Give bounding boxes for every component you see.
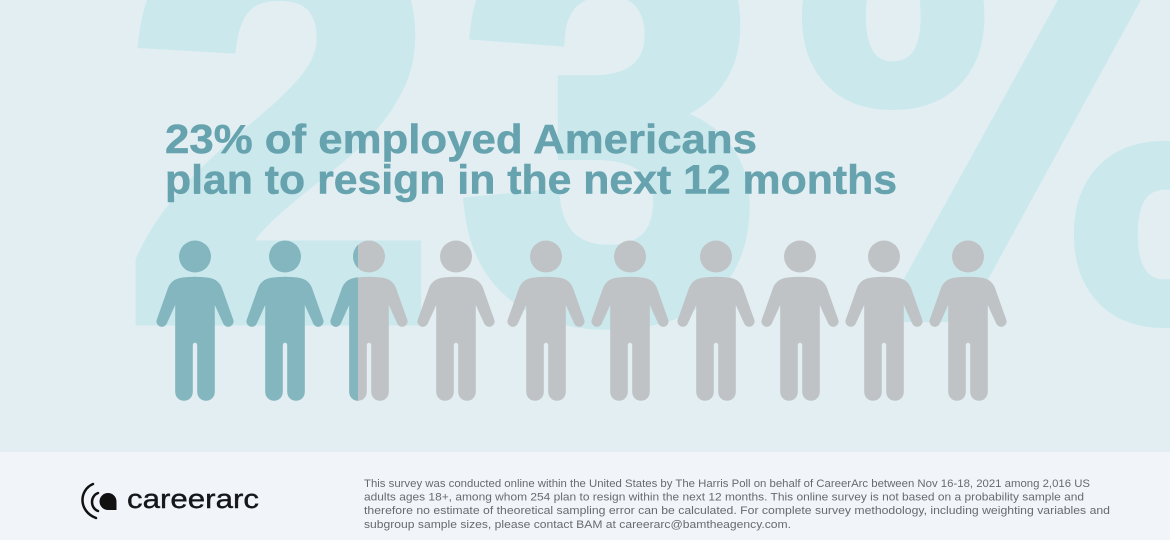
pictogram: 10 people, 23% highlighted — [156, 240, 1007, 401]
person 7 — [677, 240, 755, 401]
survey methodology note — [364, 478, 1110, 531]
survey methodology note: therefore no estimate of theoretical sampling error can be calculated. For complete survey methodology, including weighting variables and — [364, 505, 1110, 517]
person 3 partly highlighted — [330, 240, 408, 401]
icon: signal arcs and speech bubble — [82, 484, 116, 518]
survey methodology note: adults ages 18+, among whom 254 plan to resign within the next 12 months. This online survey is not based on a probability sample and — [364, 492, 1084, 504]
title: plan to resign in the next 12 months — [165, 156, 897, 202]
footer band — [0, 452, 1170, 540]
title: 23% of employed Americans — [165, 116, 757, 162]
person 5 — [507, 240, 585, 401]
survey methodology note: subgroup sample sizes, please contact BAM at careerarc@bamtheagency.com. — [364, 519, 791, 531]
person 10 — [929, 240, 1007, 401]
person 6 — [591, 240, 669, 401]
wordmark: careerarc — [127, 484, 259, 514]
person 2 highlighted — [246, 240, 324, 401]
person 9 — [845, 240, 923, 401]
survey methodology note: This survey was conducted online within the United States by The Harris Poll on behalf of CareerArc between Nov 16-18, 2021 among 2,016 US — [364, 478, 1090, 490]
person 4 — [417, 240, 495, 401]
person 8 — [761, 240, 839, 401]
title — [165, 116, 897, 202]
person 1 highlighted — [156, 240, 234, 401]
background numeral: 23% — [128, 0, 1170, 432]
logo: careerarc — [82, 484, 259, 518]
